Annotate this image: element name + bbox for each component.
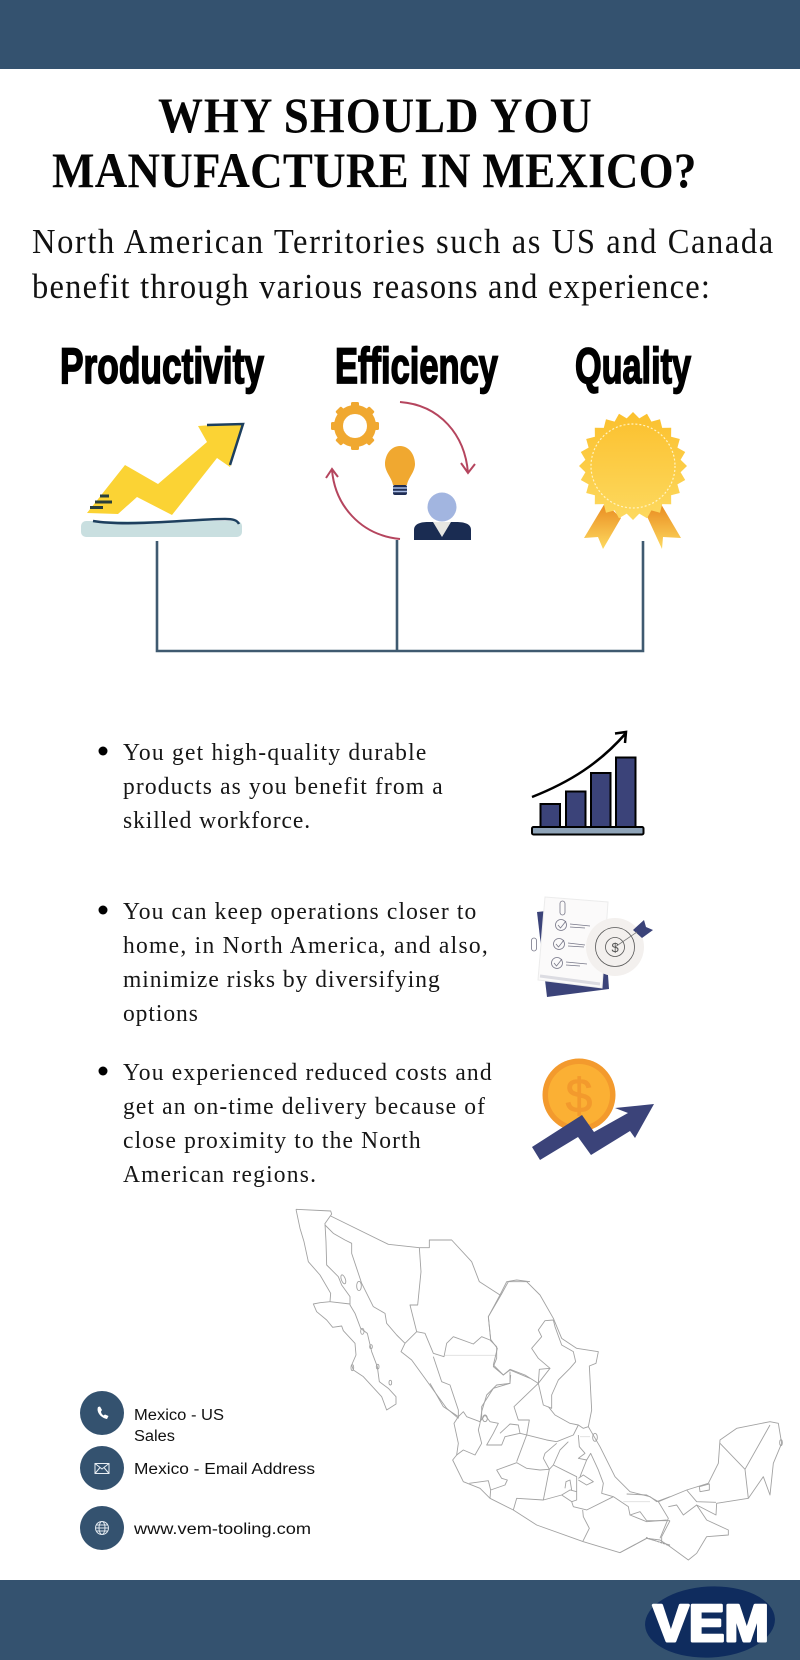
icon: checklist and target: $ (612, 940, 620, 955)
intro text (32, 223, 773, 306)
contact block (80, 1391, 315, 1550)
map: central states (430, 1282, 670, 1553)
icon: coin and arrow (532, 1058, 654, 1160)
heading: Quality: Quality (575, 338, 691, 394)
bullet: operations: You can keep operations closer to (123, 899, 476, 925)
logo: VEM (643, 1583, 777, 1660)
title: WHY SHOULD YOU (158, 89, 592, 144)
logo: VEM: VEM (653, 1595, 769, 1653)
icon: person (414, 492, 471, 540)
bullet: operations: options (123, 1001, 198, 1027)
heading: Productivity: Productivity (60, 338, 264, 394)
contact: email (80, 1446, 315, 1490)
bullet: costs: get an on-time delivery because of (123, 1094, 485, 1120)
bullet: costs: American regions. (123, 1162, 316, 1188)
intro text: benefit through various reasons and experience: (32, 268, 710, 306)
bullet: operations (98, 899, 488, 1027)
intro text: North American Territories such as US and Canada (32, 223, 773, 261)
bullet: costs (98, 1060, 492, 1188)
title (52, 89, 696, 199)
bullet: quality: skilled workforce. (123, 808, 310, 834)
arrow: top cycle (400, 402, 475, 473)
bullet: quality: You get high-quality durable (123, 740, 426, 766)
contact: email: Mexico - Email Address (134, 1461, 315, 1478)
title: MANUFACTURE IN MEXICO? (52, 144, 696, 199)
bullet: quality (98, 740, 443, 834)
bullet: operations: minimize risks by diversifying (123, 967, 440, 993)
connector lines (157, 540, 643, 651)
contact: phone: Mexico - US (134, 1407, 224, 1424)
footer banner (0, 1580, 800, 1660)
bullet: costs: You experienced reduced costs and (123, 1060, 492, 1086)
arrow: bottom cycle (326, 469, 400, 539)
bullet: operations: home, in North America, and also, (123, 933, 488, 959)
contact: phone (80, 1391, 224, 1445)
map: southeast states (620, 1422, 782, 1560)
icon: productivity arrow (81, 423, 243, 537)
bullet: costs: close proximity to the North (123, 1128, 421, 1154)
icon: bar chart (532, 732, 644, 834)
icon: coin and arrow: $ (566, 1070, 592, 1123)
icon: light bulb (385, 446, 415, 495)
contact: website (80, 1506, 311, 1550)
icon: efficiency cycle (326, 402, 475, 540)
icon: quality medal (579, 412, 687, 549)
top banner (0, 0, 800, 69)
icon: gear (331, 402, 379, 450)
heading: Efficiency: Efficiency (335, 338, 498, 394)
icon: checklist and target (532, 897, 653, 997)
map of Mexico (296, 1209, 782, 1560)
map: northwest states (296, 1209, 530, 1420)
bullet: quality: products as you benefit from a (123, 774, 443, 800)
contact: website: www.vem-tooling.com (133, 1521, 311, 1538)
contact: phone: Sales (134, 1428, 175, 1445)
